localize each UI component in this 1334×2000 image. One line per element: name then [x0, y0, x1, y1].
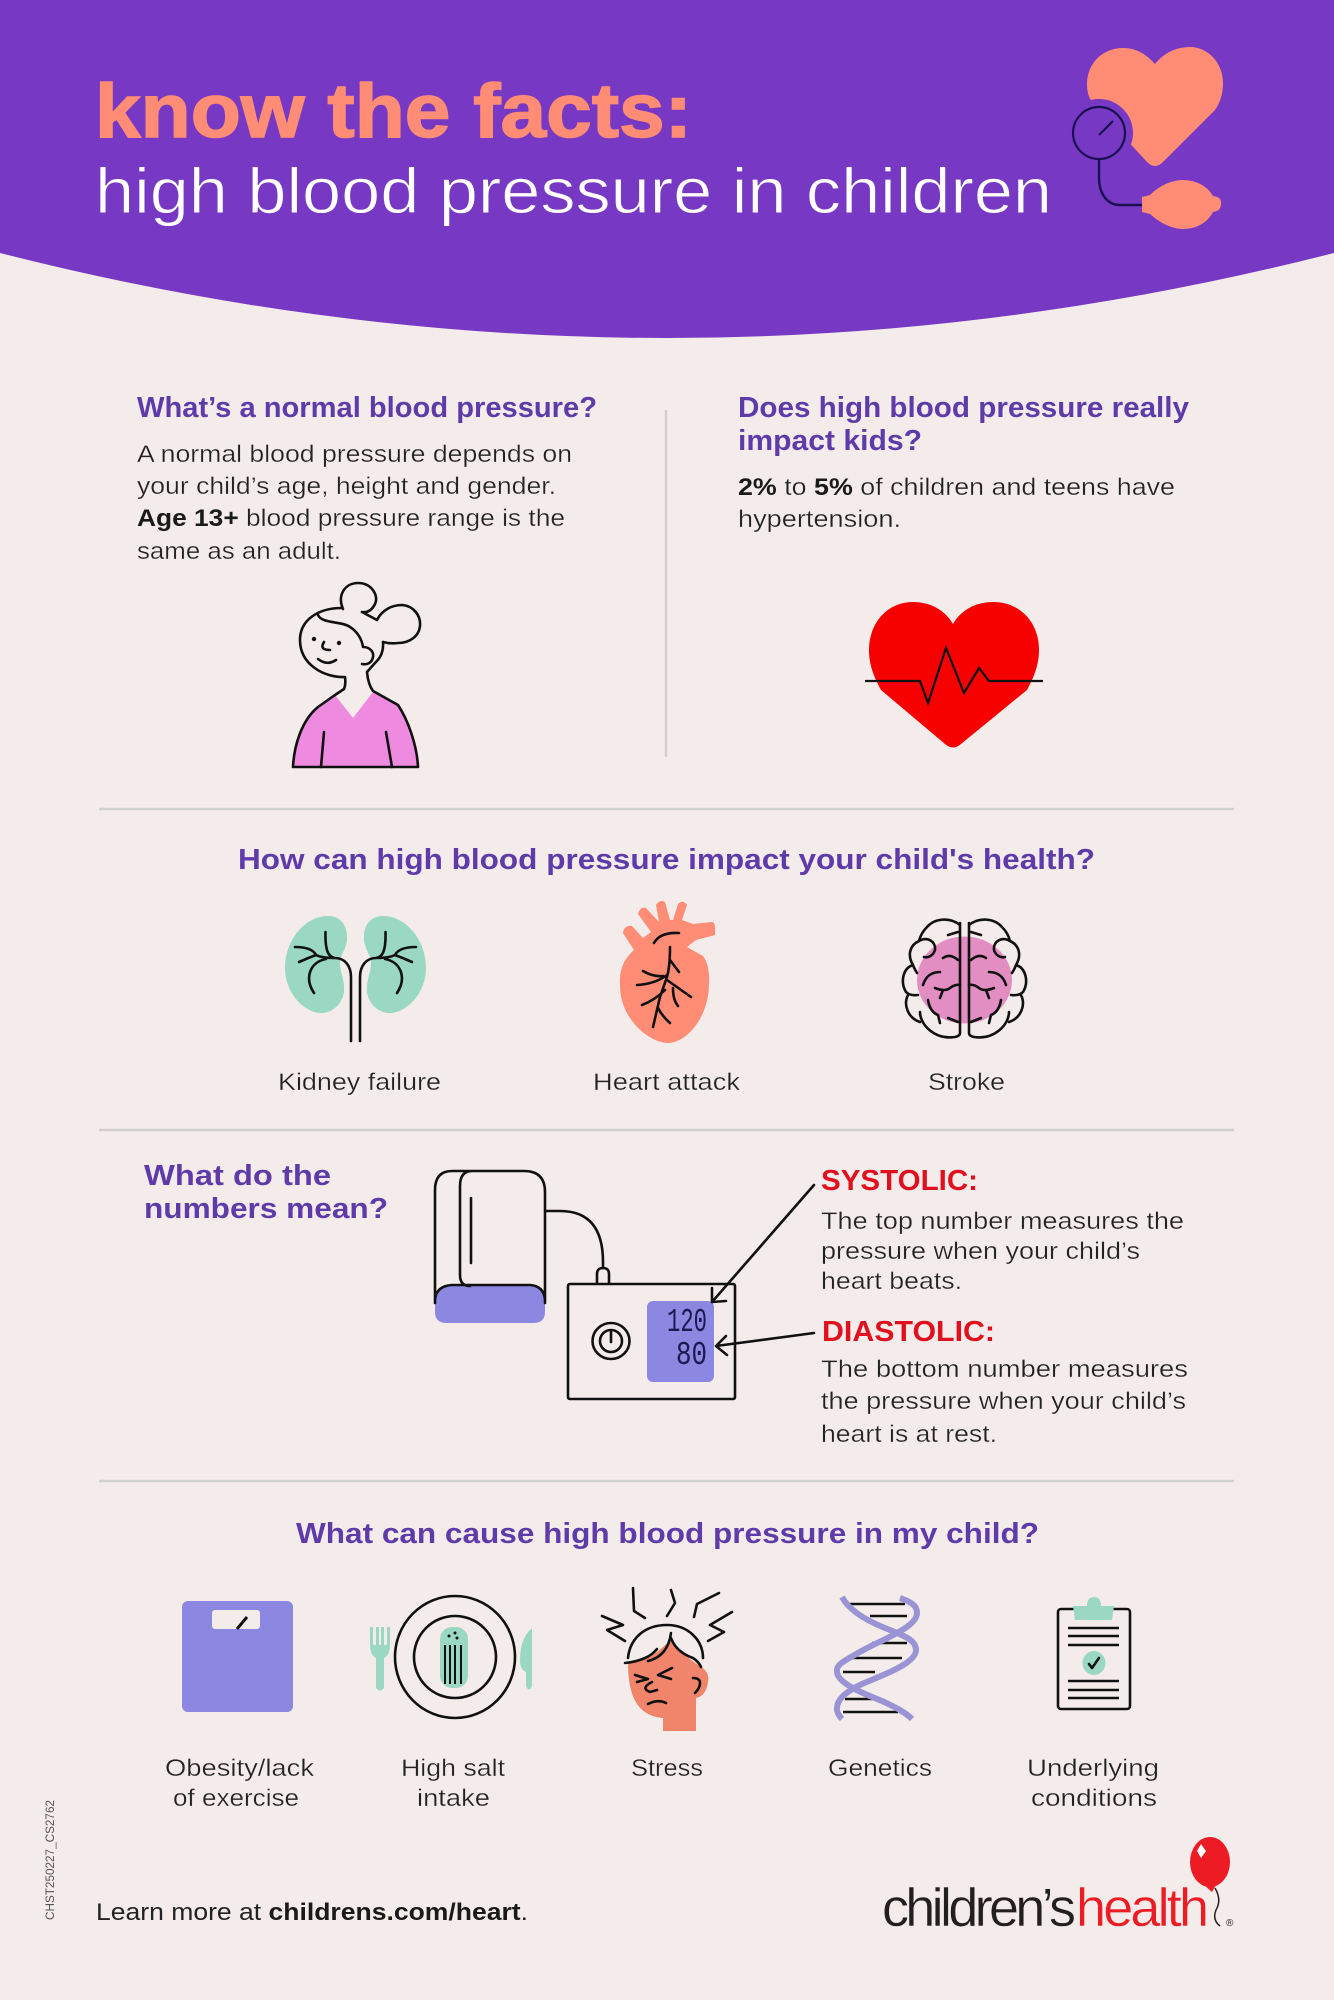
- icon: brain: [903, 920, 1026, 1037]
- label: obesity: of exercise: [173, 1785, 299, 1812]
- panel: health impacts: [238, 844, 1095, 1096]
- label: underlying conditions: Underlying: [1027, 1755, 1159, 1782]
- body text: A normal blood pressure depends on: [137, 441, 572, 468]
- document code: CHST250227_CS2762: [45, 1800, 57, 1920]
- systolic description: The top number measures the: [821, 1208, 1184, 1235]
- body text: [738, 474, 1175, 533]
- logo: children's health: health: [1076, 1878, 1209, 1938]
- call to action: Learn more at childrens.com/heart .: [96, 1899, 528, 1926]
- heading: Does high blood pressure really: [738, 392, 1189, 424]
- monitor reading: [667, 1304, 707, 1374]
- label: high salt intake: intake: [417, 1785, 490, 1812]
- heading: impact kids?: [738, 425, 922, 457]
- logo: children's health: children’s: [882, 1878, 1076, 1938]
- heading: [144, 1160, 388, 1225]
- diastolic description: the pressure when your child’s: [821, 1388, 1186, 1415]
- label: stress: Stress: [631, 1755, 703, 1782]
- monitor reading: 80: [676, 1337, 707, 1374]
- label: high salt intake: High salt: [401, 1755, 505, 1782]
- icon: girl: [293, 583, 420, 767]
- systolic description: [821, 1208, 1184, 1295]
- logo: children's health: [882, 1837, 1234, 1938]
- icon: heart with blood pressure gauge: [1065, 47, 1223, 229]
- icon: plate with salt shaker: [370, 1596, 532, 1718]
- heading: What can cause high blood pressure in my child?: [296, 1518, 1039, 1550]
- diastolic label: DIASTOLIC:: [822, 1316, 995, 1348]
- heading: How can high blood pressure impact your child's health?: [238, 844, 1095, 876]
- diastolic description: The bottom number measures: [821, 1356, 1188, 1383]
- panel: causes: [165, 1518, 1159, 1812]
- logo: children's health: ®: [1226, 1918, 1234, 1929]
- body text: same as an adult.: [137, 538, 341, 565]
- icon: DNA helix: [837, 1597, 917, 1719]
- icon: scale: [182, 1601, 293, 1712]
- icon: clipboard: [1058, 1597, 1130, 1709]
- label: genetics: Genetics: [828, 1755, 932, 1782]
- systolic description: heart beats.: [821, 1268, 962, 1295]
- diastolic description: [821, 1356, 1188, 1448]
- icon: blood pressure cuff and monitor: [435, 1171, 735, 1399]
- icon: kidneys: [285, 916, 426, 1041]
- body text: 2% to 5% of children and teens have: [738, 474, 1175, 501]
- icon: red heart with ECG line: [865, 602, 1043, 748]
- heading: numbers mean?: [144, 1193, 388, 1225]
- label: heart attack: Heart attack: [593, 1069, 741, 1096]
- panel: what do the numbers mean: [144, 1160, 1188, 1448]
- label: underlying conditions: conditions: [1031, 1785, 1157, 1812]
- icon: heart organ: [620, 901, 715, 1043]
- body text: hypertension.: [738, 506, 901, 533]
- arrow: to diastolic reading: [716, 1333, 814, 1355]
- heading: What’s a normal blood pressure?: [137, 392, 597, 424]
- monitor reading: 120: [667, 1304, 707, 1341]
- heading: [738, 392, 1189, 457]
- label: obesity: [165, 1755, 315, 1812]
- title line 2: high blood pressure in children: [95, 155, 1052, 227]
- title line 1: know the facts:: [95, 69, 692, 154]
- divider between top panels: [665, 410, 667, 757]
- label: obesity: Obesity/lack: [165, 1755, 315, 1782]
- body text: [137, 441, 572, 565]
- header banner: [0, 0, 1334, 338]
- heading: What do the: [144, 1160, 331, 1192]
- label: kidney failure: Kidney failure: [278, 1069, 441, 1096]
- label: high salt intake: [401, 1755, 505, 1812]
- systolic description: pressure when your child’s: [821, 1238, 1140, 1265]
- body text: Age 13+ blood pressure range is the: [137, 505, 565, 532]
- arrow: to systolic reading: [712, 1185, 814, 1302]
- body text: your child’s age, height and gender.: [137, 473, 556, 500]
- diastolic description: heart is at rest.: [821, 1421, 997, 1448]
- label: underlying conditions: [1027, 1755, 1159, 1812]
- panel: normal blood pressure: [137, 392, 597, 767]
- label: stroke: Stroke: [928, 1069, 1005, 1096]
- systolic label: SYSTOLIC:: [821, 1165, 978, 1197]
- panel: does high blood pressure impact kids: [738, 392, 1189, 748]
- icon: stressed face: [602, 1588, 732, 1731]
